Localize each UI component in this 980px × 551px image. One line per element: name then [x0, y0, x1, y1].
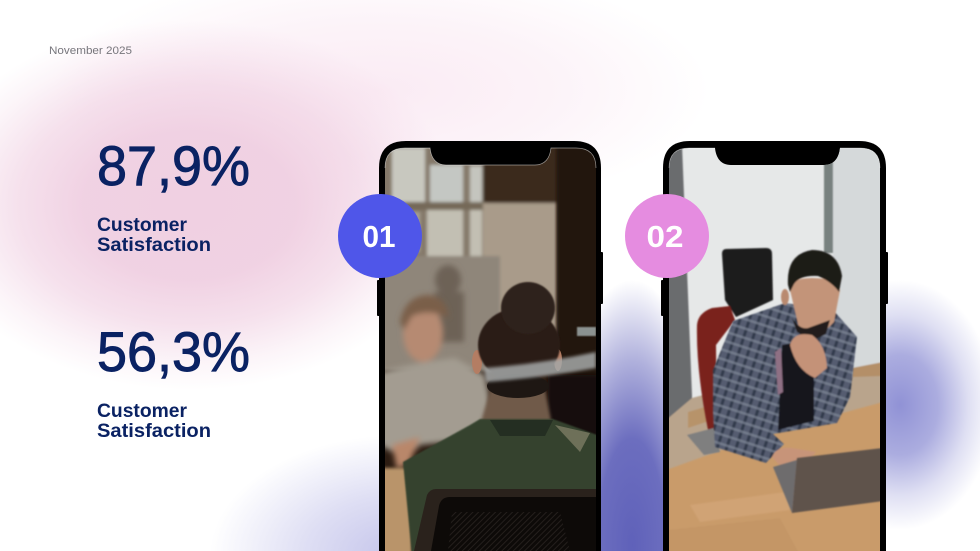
laptop — [773, 448, 883, 513]
photo: man working on laptop — [666, 145, 883, 551]
stat label: Customer — [97, 401, 188, 422]
number badge 02: 02 — [646, 219, 684, 254]
stat label: Satisfaction — [97, 235, 211, 256]
phone 1 with meeting photo — [377, 141, 603, 551]
stat label: Customer — [97, 215, 188, 236]
phone 2 with man at laptop photo — [661, 141, 888, 551]
window frames — [666, 145, 883, 480]
number badge 02 — [625, 194, 709, 278]
infographic slide — [50, 46, 888, 551]
number badge 01: 01 — [362, 219, 396, 254]
man in plaid shirt — [713, 250, 857, 470]
number badge 01 — [338, 194, 422, 278]
wooden table — [666, 402, 883, 551]
woman from behind — [403, 282, 600, 551]
man facing camera — [380, 295, 495, 470]
stat: 87,9% customer satisfaction — [97, 134, 250, 256]
stat value 56,3%: 56,3% — [97, 320, 250, 383]
office chair — [687, 248, 773, 455]
reflected silhouette — [434, 265, 464, 342]
date label: November 2025 — [49, 45, 132, 57]
stat value 87,9%: 87,9% — [97, 134, 250, 197]
photo: meeting seen through glass — [380, 145, 600, 551]
stat: 56,3% customer satisfaction — [97, 320, 250, 442]
stat label: Satisfaction — [97, 421, 211, 442]
office chair back — [414, 489, 596, 551]
table corner — [385, 466, 412, 551]
